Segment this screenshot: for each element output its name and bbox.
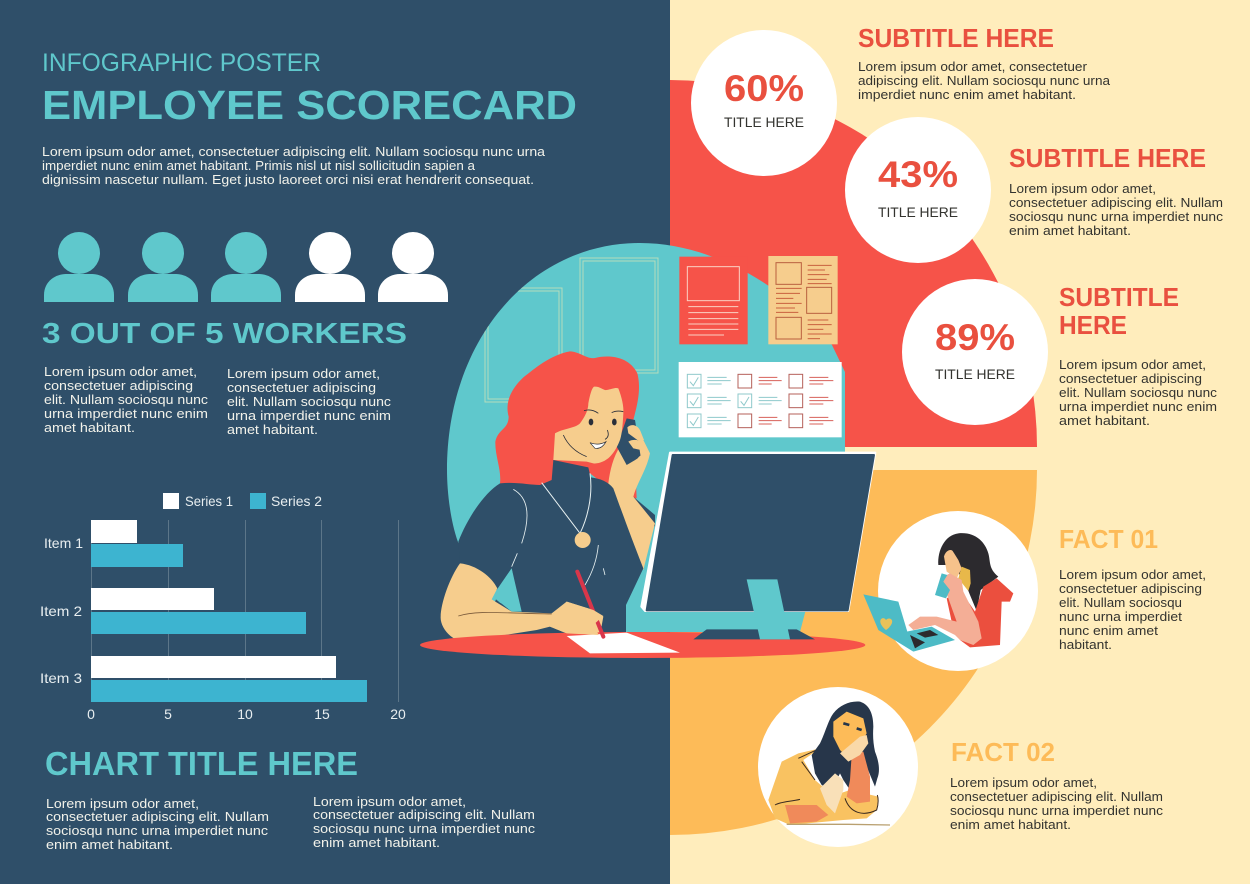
panel: right cream background [670,0,1250,884]
text block: workers right: Lorem ipsum odor amet, [227,366,380,381]
text block: subtitle 3: Lorem ipsum odor amet, [1059,357,1206,372]
teal wedge under sleeve [495,568,522,612]
text block: fact 01: habitant. [1059,637,1112,652]
fact circle 2: woman writing [758,687,918,847]
woman: necklace [542,473,591,548]
text block: fact 01: elit. Nullam sociosqu [1059,595,1182,610]
paper [567,633,680,653]
text block: intro [42,144,546,187]
heading: workers stat: 3 OUT OF 5 WORKERS [42,318,407,350]
text block: subtitle 3: urna imperdiet nunc enim [1059,399,1217,414]
chart legend [163,493,322,509]
text block: workers right [227,366,392,437]
text block: intro: Lorem ipsum odor amet, consectetuer adipiscing elit. Nullam sociosqu nunc urna [42,144,546,159]
monitor base [693,629,815,639]
face [944,550,962,578]
subtitle 3 [1059,282,1179,340]
text block: subtitle 2: consectetuer adipiscing elit. Nullam [1009,195,1223,210]
text block: intro: dignissim nascetur nullam. Eget justo laoreet orci nisi erat hendrerit consequat. [42,172,534,187]
text block: subtitle 3: amet habitant. [1059,413,1150,428]
subtitle 3: HERE [1059,310,1127,340]
heading: poster label: INFOGRAPHIC POSTER [42,49,321,77]
cup [935,573,950,598]
woman: writing arm [441,563,603,642]
woman: face [553,387,623,463]
text block: subtitle 2: Lorem ipsum odor amet, [1009,181,1156,196]
stat circle: 43% [845,117,991,263]
text block: subtitle 1: adipiscing elit. Nullam sociosqu nunc urna [858,73,1111,88]
stat circle: 89%: 89% [935,317,1015,358]
shirt [820,773,843,813]
stat circle: 43%: 43% [878,154,958,195]
text block: fact 01: Lorem ipsum odor amet, [1059,567,1206,582]
text block: workers left: Lorem ipsum odor amet, [44,364,197,379]
jacket [768,748,878,825]
text block: workers left [44,364,209,435]
chart axis labels: 0 [87,706,95,722]
monitor stand [747,579,790,639]
text block: workers right: urna imperdiet nunc enim [227,408,391,423]
chart legend: Series 1 [185,493,233,509]
text block: workers right: elit. Nullam sociosqu nunc [227,394,392,409]
chart axis labels: Item 3 [40,670,82,686]
hair [812,702,879,790]
hand holding pencil [550,602,603,635]
central illustration: woman at desk [420,243,875,658]
orange quarter circle [670,470,1037,835]
text block: chart left [46,796,269,852]
text block: fact 01: consectetuer adipiscing [1059,581,1202,596]
text block: chart left: consectetuer adipiscing elit. Nullam [46,809,269,824]
woman: hair [495,351,639,498]
text block: subtitle 3 [1059,357,1218,428]
text block: workers left: amet habitant. [44,420,135,435]
heading: chart title: CHART TITLE HERE [45,745,358,782]
document: checklist [679,362,842,437]
fact circle 1: woman with laptop [863,511,1038,671]
monitor screen [641,453,875,611]
text block: chart right: Lorem ipsum odor amet, [313,794,466,809]
heading: fact 01: FACT 01 [1059,524,1158,554]
navy wedge under sleeve [491,599,511,612]
text block: chart right [313,794,536,850]
chart axis labels: Item 2 [40,603,82,619]
text block: fact 01 [1059,567,1206,652]
chart axis labels: 5 [164,706,172,722]
text block: subtitle 3: elit. Nullam sociosqu nunc [1059,385,1218,400]
woman: raised arm and hand [608,427,655,570]
text block: fact 02: sociosqu nunc urna imperdiet nunc [950,803,1164,818]
woman: navy strip behind arm [633,497,655,527]
text block: chart right: enim amet habitant. [313,835,440,850]
text block: workers right: amet habitant. [227,422,318,437]
text block: fact 02 [950,775,1164,832]
text block: workers left: elit. Nullam sociosqu nunc [44,392,209,407]
wall frames [485,258,658,402]
eyes [843,723,862,730]
stat circle: 60%: TITLE HERE [724,114,804,130]
teal backdrop [447,243,845,632]
text block: subtitle 2: sociosqu nunc urna imperdiet nunc [1009,209,1224,224]
text block: chart left: sociosqu nunc urna imperdiet nunc [46,823,269,838]
pencil [577,572,603,637]
chart bars [91,520,367,702]
woman: phone [617,418,641,465]
text block: fact 02: Lorem ipsum odor amet, [950,775,1097,790]
writing hand [785,805,828,823]
document: red [679,257,748,344]
text block: chart right: consectetuer adipiscing elit. Nullam [313,807,535,822]
woman: sleeve seams [512,489,605,585]
text block: fact 02: consectetuer adipiscing elit. Nullam [950,789,1163,804]
jacket outlines [775,748,878,813]
woman: facial features [563,410,623,457]
subtitle 2: SUBTITLE HERE [1009,143,1206,173]
chart axis labels: Item 1 [44,535,83,551]
text block: subtitle 1: Lorem ipsum odor amet, consectetuer [858,59,1088,74]
panel: left navy background [0,0,670,884]
forearm [847,752,870,803]
stat circle: 89% [902,279,1048,425]
heading: fact 02: FACT 02 [951,737,1055,767]
text block: fact 01: nunc enim amet [1059,623,1158,638]
desk [420,632,865,658]
chart axis labels [40,535,406,722]
subtitle 1: SUBTITLE HERE [858,23,1054,53]
hair [938,533,998,611]
text block: fact 01: nunc urna imperdiet [1059,609,1182,624]
subtitle 3: SUBTITLE [1059,282,1179,312]
text block: workers left: urna imperdiet nunc enim [44,406,208,421]
stat circle: 60%: 60% [724,68,804,109]
text block: subtitle 2: enim amet habitant. [1009,223,1131,238]
hoodie [947,578,1013,647]
chart axis labels: 10 [237,706,253,722]
stat circle: 89%: TITLE HERE [935,366,1015,382]
text block: fact 02: enim amet habitant. [950,817,1071,832]
text block: workers left: consectetuer adipiscing [44,378,193,393]
text block: intro: imperdiet nunc enim amet habitant. Primis nisl ut nisl sollicitudin sapien a [42,158,476,173]
text block: chart right: sociosqu nunc urna imperdiet nunc [313,821,536,836]
text block: subtitle 2 [1009,181,1224,238]
hand on chin [840,735,868,762]
heading: main title: EMPLOYEE SCORECARD [42,82,577,128]
document: tan [768,256,838,344]
desk line [787,822,890,827]
woman: fingers over phone [627,425,649,473]
text block: workers right: consectetuer adipiscing [227,380,376,395]
arm crease [458,612,552,616]
neck in shade [958,567,971,591]
face [833,712,867,760]
text block: chart left: Lorem ipsum odor amet, [46,796,199,811]
chart axis labels: 20 [390,706,406,722]
text block: chart left: enim amet habitant. [46,837,173,852]
red quarter circle [670,80,1037,447]
arm [908,573,982,645]
icon row: 3 of 5 workers [44,232,448,302]
text block: subtitle 1: imperdiet nunc enim amet habitant. [858,87,1076,102]
bar chart [40,493,406,722]
chart legend: Series 2 [271,493,322,509]
woman: torso [458,460,643,632]
laptop [863,594,913,652]
heart [880,618,892,630]
text block: subtitle 3: consectetuer adipiscing [1059,371,1202,386]
chart axis labels: 15 [314,706,330,722]
text block: subtitle 1 [858,59,1111,102]
stat circle: 43%: TITLE HERE [878,204,958,220]
stat circle: 60% [691,30,837,176]
